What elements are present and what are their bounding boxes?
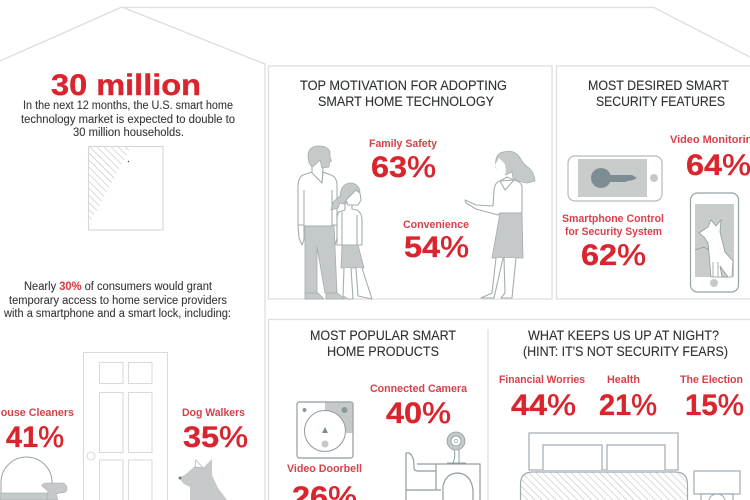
heading: popular products	[310, 328, 456, 359]
icon: dog	[178, 459, 227, 500]
stat: financial worries	[499, 374, 585, 422]
stat: video monitoring: 64%	[686, 149, 750, 182]
icon: house window	[88, 146, 163, 230]
icon: front door	[84, 352, 168, 500]
icon: cleaning bucket and spray bottle	[0, 457, 67, 500]
panel: what keeps us up at night	[499, 328, 744, 500]
panel: security features frame	[556, 66, 750, 299]
stat: video monitoring	[670, 134, 750, 182]
stat: dog walkers: 35%	[183, 421, 248, 454]
stat: dog walkers: Dog Walkers	[182, 407, 245, 419]
stat: convenience: 54%	[404, 231, 469, 264]
panel: popular products	[287, 328, 480, 500]
stat: smartphone control: 62%	[581, 239, 646, 272]
text block: household forecast: In the next 12 months, the U.S. smart home	[23, 100, 233, 112]
stat: convenience	[403, 219, 469, 264]
text block: temporary access	[3, 281, 231, 320]
heading: top motivation: SMART HOME TECHNOLOGY	[318, 94, 494, 109]
text block: household forecast: technology market is expected to double to	[21, 114, 235, 126]
icon: landscape phone with key	[568, 156, 662, 201]
panel: popular products frame	[268, 320, 750, 500]
stat: smartphone control	[562, 213, 664, 272]
text block: temporary access: temporary access to home service providers	[9, 295, 227, 307]
panel divider: products and night worries	[487, 329, 489, 500]
heading: night worries: WHAT KEEPS US UP AT NIGHT?	[528, 328, 719, 343]
stat: family safety: 63%	[371, 151, 436, 184]
heading: top motivation	[300, 78, 507, 109]
heading: top motivation: TOP MOTIVATION FOR ADOPTING	[300, 78, 507, 93]
stat: financial worries: Financial Worries	[499, 374, 585, 386]
icon: man	[298, 146, 345, 299]
heading: security features	[588, 78, 729, 109]
text block: temporary access: with a smartphone and a smart lock, including:	[3, 308, 231, 320]
icon: video doorbell	[297, 402, 353, 458]
text block: household forecast: 30 million households.	[73, 127, 184, 139]
icon: woman	[465, 151, 535, 298]
panel: top motivation	[298, 78, 535, 299]
stat: family safety	[369, 138, 438, 184]
stat: house cleaners	[0, 407, 74, 454]
stat: video doorbell	[287, 463, 362, 500]
panel: security features	[562, 78, 750, 292]
stat: family safety: Family Safety	[369, 138, 438, 150]
icon: portrait phone with dog	[690, 193, 738, 292]
heading: night worries	[523, 328, 728, 359]
stat: connected camera: Connected Camera	[370, 383, 468, 395]
stat: connected camera	[370, 383, 468, 430]
stat: health: Health	[607, 374, 640, 386]
heading: security features: MOST DESIRED SMART	[588, 78, 729, 93]
icon: bed and nightstand	[520, 433, 740, 500]
text block: temporary access: Nearly 30% of consumers would grant	[24, 281, 213, 293]
stat: video doorbell: Video Doorbell	[287, 463, 362, 475]
stat: health	[599, 374, 657, 422]
stat: smartphone control: for Security System	[565, 226, 662, 238]
stat: the election: 15%	[685, 389, 744, 422]
heading: night worries: (HINT: IT'S NOT SECURITY FEARS)	[523, 344, 728, 359]
heading: security features: SECURITY FEATURES	[596, 94, 725, 109]
stat: connected camera: 40%	[386, 397, 451, 430]
stat: dog walkers	[182, 407, 248, 454]
icon: girl	[331, 183, 372, 299]
icon: connected camera on table	[406, 432, 480, 500]
stat: the election	[680, 374, 744, 422]
stat: convenience: Convenience	[403, 219, 469, 231]
stat: smartphone control: Smartphone Control	[562, 213, 664, 225]
heading: 30 million: 30 million	[51, 69, 201, 102]
heading: popular products: MOST POPULAR SMART	[310, 328, 456, 343]
text block: household forecast	[21, 100, 235, 139]
stat: house cleaners: 41%	[6, 421, 64, 454]
stat: financial worries: 44%	[511, 389, 576, 422]
stat: health: 21%	[599, 389, 657, 422]
heading: popular products: HOME PRODUCTS	[327, 344, 439, 359]
stat: the election: The Election	[680, 374, 743, 386]
panel: top motivation frame	[268, 66, 552, 299]
panel: 30 million stat	[21, 69, 235, 139]
